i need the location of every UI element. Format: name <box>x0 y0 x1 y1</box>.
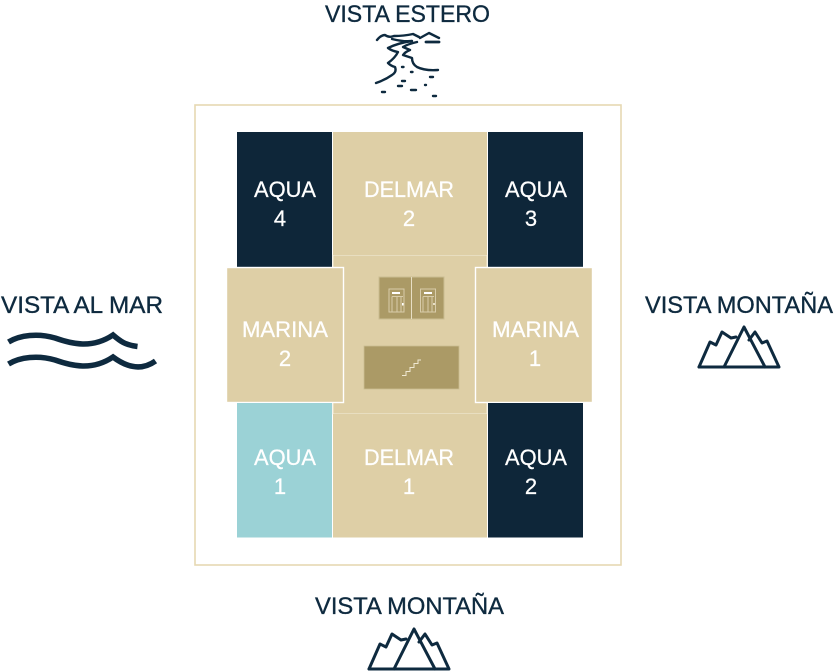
panel: aqua 1 <box>237 403 332 538</box>
panel: delmar 2: 2 <box>403 206 415 231</box>
heading: vista al mar: VISTA AL MAR <box>1 292 163 319</box>
panel: marina 1: 1 <box>529 346 541 371</box>
panel: delmar 1 <box>333 414 487 538</box>
icon: elevators <box>379 277 444 319</box>
panel: marina 2: 2 <box>279 346 291 371</box>
panel: aqua 2: 2 <box>525 474 537 499</box>
icon: mountains right <box>699 327 779 367</box>
panel: delmar 2 <box>333 132 487 255</box>
panel: marina 2 <box>226 268 344 402</box>
panel: marina 1: MARINA <box>492 317 579 342</box>
panel: delmar 1: 1 <box>403 474 415 499</box>
panel: aqua 1: 1 <box>274 474 286 499</box>
panel: aqua 3: AQUA <box>505 177 567 202</box>
panel: marina 2: MARINA <box>242 317 328 342</box>
heading: vista montaña bottom: VISTA MONTAÑA <box>315 593 504 620</box>
icon: stairs <box>364 346 459 389</box>
panel: aqua 2: AQUA <box>505 445 567 470</box>
panel: central core <box>333 255 487 414</box>
outer building outline <box>195 105 621 565</box>
panel: delmar 1: DELMAR <box>364 445 454 470</box>
panel: aqua 4: AQUA <box>254 177 316 202</box>
panel: aqua 4: 4 <box>274 206 286 231</box>
panel: delmar 2: DELMAR <box>364 177 454 202</box>
heading: vista montaña right: VISTA MONTAÑA <box>645 292 833 319</box>
panel: aqua 4 <box>237 132 332 267</box>
panel: marina 1 <box>476 268 592 402</box>
icon: estuary <box>376 33 439 96</box>
icon: waves <box>8 335 156 367</box>
panel: aqua 3: 3 <box>525 206 537 231</box>
panel: aqua 3 <box>488 132 583 267</box>
panel: aqua 1: AQUA <box>254 445 316 470</box>
icon: mountains bottom <box>369 629 449 669</box>
heading: vista estero: VISTA ESTERO <box>325 1 490 28</box>
panel: aqua 2 <box>488 403 583 538</box>
